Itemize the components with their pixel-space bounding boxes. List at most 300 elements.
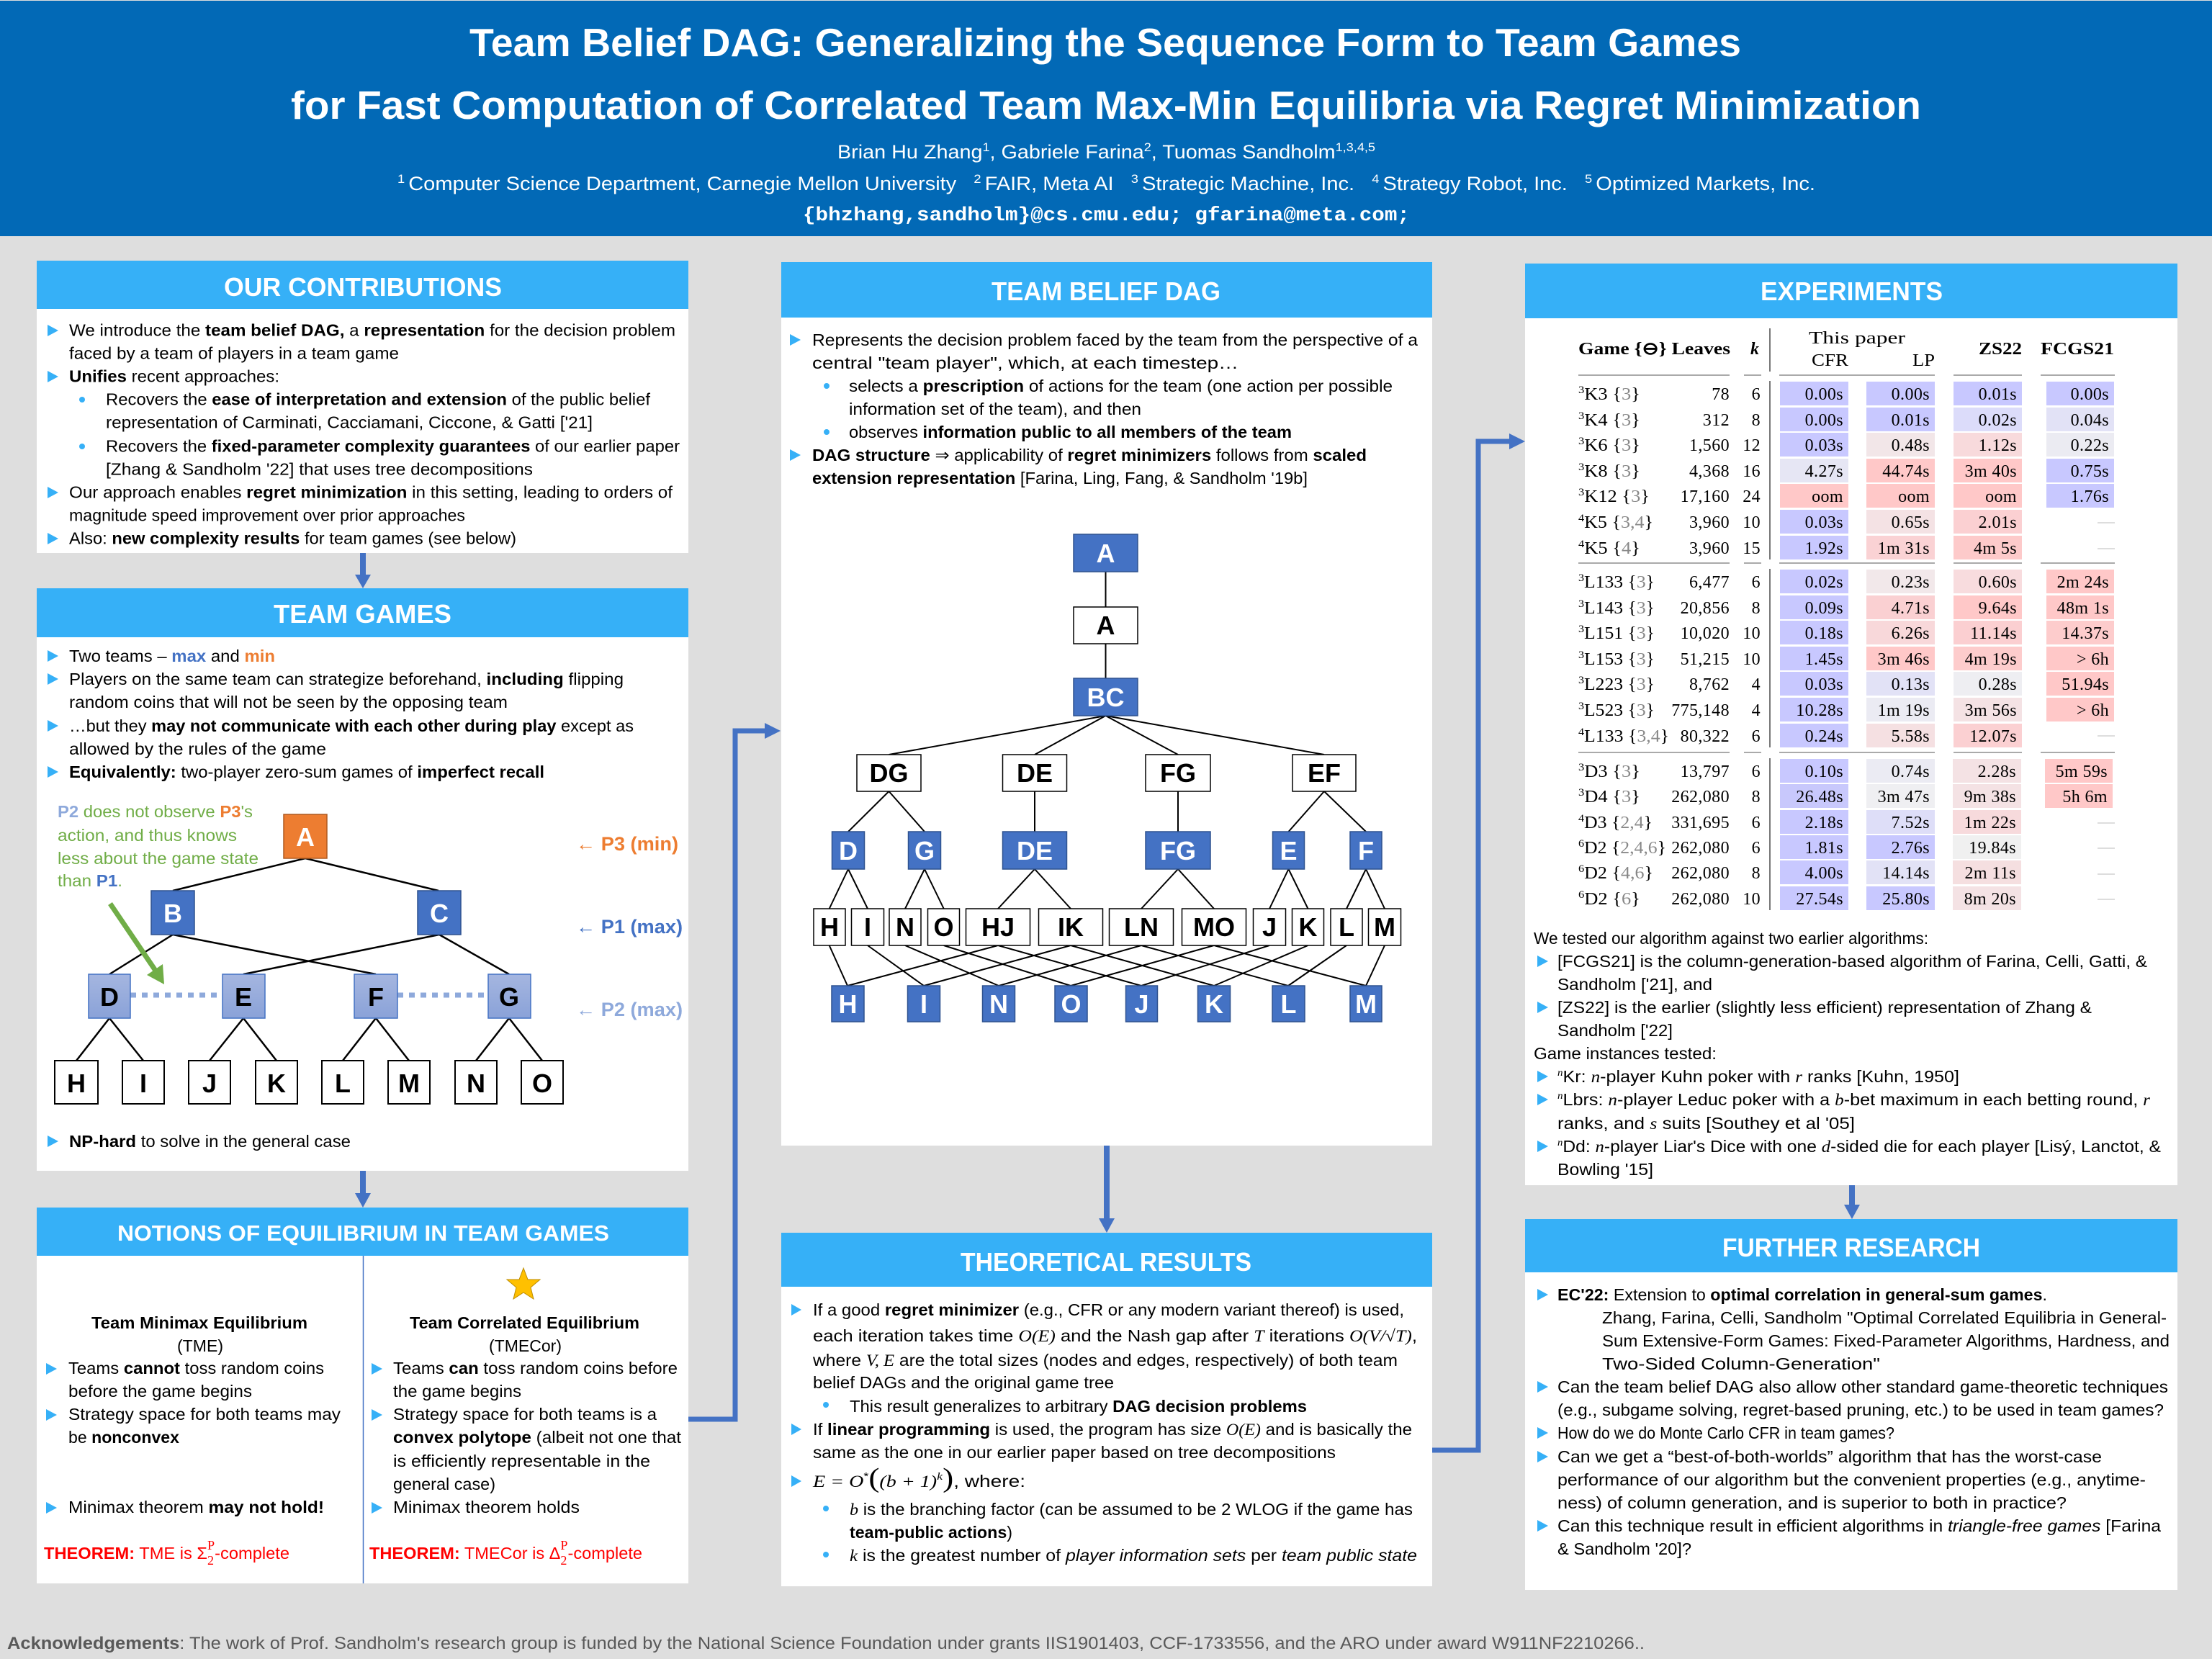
row 3L523: 775,148 [1671,701,1730,720]
experiments text: Lbrs [1563,1090,1598,1109]
row 3L153: L153 { [1584,650,1637,669]
node N blue: N [989,989,1008,1019]
callout: P2 vs P1 information: P2 does not observe P3's [58,802,253,821]
leaf L: L [335,1069,351,1098]
experiments text: Sandholm ['22] [1557,1021,1673,1040]
DAG diagram [814,534,1401,1022]
row 3K6: 12 [1743,436,1761,455]
row 4K5 {3,4}: 3,960 [1689,513,1730,532]
row 4K5 {4}: 1m 31s [1878,539,1930,558]
panel: theoretical results [781,1233,1432,1586]
row 6D2 {2,4,6} [1578,835,2021,859]
poster header banner [0,1,2212,236]
node F blue [1350,832,1382,869]
node DE [1002,755,1067,791]
NP-hard note: NP-hard to solve in the general case [69,1132,351,1151]
table header: CFR [1812,351,1848,370]
node A [284,814,327,858]
row 3L153: 4m 19s [1965,650,2017,669]
row 3D3: 3 [1578,762,1584,773]
experiments text: Dd [1563,1137,1586,1156]
row 4K5 {3,4}: K5 { [1584,513,1621,532]
row 3D3: 0.10s [1805,763,1843,781]
panel: team belief dag [781,262,1432,1146]
panel: our contributions [37,261,688,553]
node FG: FG [1160,758,1196,788]
column: team correlated equilibrium: Teams can toss random coins before [393,1359,678,1377]
row 4D3: 6 [1752,814,1761,832]
row 3L143: 8 [1752,599,1761,618]
row 3L153: 10 [1743,650,1761,669]
row 3L223: 4 [1752,675,1761,694]
row 6D2 {4,6}: 4.00s [1805,864,1843,883]
icon: star [507,1268,540,1299]
row 3L523: 10.28s [1796,701,1843,720]
table header: LP [1912,351,1935,370]
contributions text: representation of Carminati, Cacciamani, Ciccone, & Gatti ['21] [106,413,593,432]
arrow: green pointer to information set [110,904,164,984]
team games text: …but they may not communicate with each other during play except as [69,716,634,735]
row 4K5 {3,4}: 4 [1578,513,1585,524]
row 3K12: K12 { [1584,487,1631,506]
bullets [791,1304,801,1487]
row 3D4: 3m 47s [1878,788,1930,806]
row 3L143: L143 { [1584,599,1637,618]
node H blue: H [838,989,857,1019]
row 4K5 {4}: 4m 5s [1974,539,2017,558]
leaf H [55,1061,98,1104]
experiments text: [ZS22] is the earlier (slightly less efficient) representation of Zhang & [1557,998,2092,1017]
affiliations: Strategic Machine, Inc. [1142,173,1372,194]
callout: P2 vs P1 information: less about the game state [58,849,258,868]
node L white: L [1339,912,1354,942]
team belief dag text: extension representation [Farina, Ling, Fang, & Sandholm '19b] [812,469,1308,487]
column: team correlated equilibrium: convex polytope (albeit not one that [393,1428,681,1447]
table header: FCGS21 [2041,340,2114,359]
node N white [889,909,921,945]
callout: P2 vs P1 information: than P1. [58,871,122,890]
row 3L523: 3} [1637,701,1654,720]
contributions text: Unifies recent approaches: [69,367,279,386]
heading: experiments: EXPERIMENTS [1761,276,1943,306]
row 3L223: 0.28s [1979,675,2017,694]
team belief dag text: selects a prescription of actions for the team (one action per possible [849,377,1393,395]
row 6D2 {2,4,6}: 1.81s [1805,839,1843,858]
panel: further research [1525,1219,2177,1590]
row 3L153: 3m 46s [1878,650,1930,669]
theoretical results text: (b + 1) [879,1473,937,1491]
bullets [48,650,58,778]
heading: notions: NOTIONS OF EQUILIBRIUM IN TEAM GAMES [117,1220,609,1246]
node J white: J [1262,912,1277,942]
row 3K12: oom [1812,487,1843,506]
row 3L151 [1578,621,2114,644]
row 4D3: 4 [1578,813,1585,824]
row 4K5 {3,4}: 0.03s [1805,513,1843,532]
row 3L151: 3 [1578,624,1584,635]
row 3D4: D4 { [1584,788,1622,806]
theoretical results text: each iteration takes time O(E) and the Nash gap after T iterations O(V/√T) , [813,1326,1417,1346]
row 3D4: 8 [1752,788,1761,806]
theorem: TMECor: THEOREM: TMECor is Δ [369,1544,560,1563]
row 3L153: > 6h [2077,650,2109,669]
row 4K5 {3,4}: 10 [1743,513,1761,532]
row 6D2 {6}: 6 [1578,889,1585,901]
row 3L523 [1578,698,2114,721]
row 3D3 [1578,759,2113,783]
team games text: Players on the same team can strategize beforehand, including flipping [69,670,624,688]
row 3L151: 6.26s [1892,624,1930,643]
row 3D3: 6 [1752,763,1761,781]
row 4K5 {4}: 3,960 [1689,539,1730,558]
row 3K8: 3m 40s [1965,462,2017,481]
bullet: NP-hard [48,1136,58,1147]
row 6D2 {2,4,6}: 6 [1752,839,1761,858]
experiments text: n [1557,1138,1563,1148]
theoretical results text: ( [868,1463,879,1493]
row 3L523: L523 { [1584,701,1637,720]
row 3L223: 8,762 [1689,675,1730,694]
row 3K12: 3 [1578,487,1584,498]
row 3L523: 4 [1752,701,1761,720]
affiliations: 1 [397,172,408,186]
column: team correlated equilibrium: (TMECor) [489,1336,562,1355]
row 4L133: 5.58s [1892,727,1930,746]
theoretical results text: b is the branching factor (can be assumed to be 2 WLOG if the game has [850,1500,1413,1519]
row 3K8: 0.75s [2071,462,2109,481]
arrow: contributions to team games [355,553,371,588]
node M white [1368,909,1401,945]
row 3L133: L133 { [1584,573,1637,592]
node D [89,974,130,1018]
theoretical results text: k is the greatest number of player information sets per team public state [850,1546,1417,1565]
node K blue [1198,986,1230,1022]
row 6D2 {2,4,6}: D2 { [1584,839,1620,858]
heading: team belief dag: TEAM BELIEF DAG [992,276,1220,306]
row 3K12: oom [1898,487,1930,506]
node BC [1074,678,1138,716]
row 6D2 {6}: 10 [1743,890,1761,909]
experiments text: n [1557,1091,1563,1102]
panel: notions of equilibrium [37,1208,688,1583]
row 3L151: 10 [1743,624,1761,643]
row 3L223: 0.03s [1805,675,1843,694]
heading: further research: FURTHER RESEARCH [1722,1233,1980,1262]
column: team correlated equilibrium: Strategy space for both teams is a [393,1405,657,1424]
title: for Fast Computation of Correlated Team Max-Min Equilibria via Regret Minimization [291,83,1921,127]
row 4L133: 4 [1578,727,1585,738]
row 6D2 {4,6}: 6 [1578,863,1585,875]
experiments text: We tested our algorithm against two earlier algorithms: [1534,929,1928,948]
row 4K5 {4}: 15 [1743,539,1761,558]
row 3K8 [1578,459,2114,482]
node A (observation) [1074,607,1138,644]
DAG edges [830,572,1385,986]
contributions text: We introduce the team belief DAG, a representation for the decision problem [69,321,675,340]
further research text: Zhang, Farina, Celli, Sandholm "Optimal Correlated Equilibria in General- [1602,1308,2167,1327]
node N blue [982,986,1015,1022]
theoretical results text: ) [943,1463,953,1493]
team games text: random coins that will not be seen by the opposing team [69,693,508,711]
row 3K4: 3} [1622,411,1640,430]
row 3L143: 9.64s [1979,599,2017,618]
theoretical results text: k [937,1471,943,1483]
leaf J: J [202,1069,217,1098]
node I blue [907,986,940,1022]
column: team minimax equilibrium: before the game begins [68,1382,252,1401]
row 3K12: 3} [1631,487,1649,506]
row 4D3: D3 { [1584,814,1620,832]
further research text: ness) of column generation, and is superior to both in practice? [1557,1493,2067,1512]
row 3K6: 1.12s [1979,436,2017,455]
table header [1578,329,2114,370]
row 3K3: 0.00s [1805,385,1843,404]
node IK [1038,909,1103,945]
row 3K4: 312 [1703,411,1730,430]
row 3L143: 20,856 [1681,599,1730,618]
theorem: TME: P [207,1538,215,1552]
callout: P2 vs P1 information [58,802,258,890]
node LN [1109,909,1174,945]
node F blue: F [1358,836,1374,866]
experiments text: Kr [1563,1067,1581,1086]
row 6D2 {2,4,6}: 2,4,6} [1620,839,1665,858]
row 3L523: 3 [1578,701,1584,712]
affiliations: 5 [1585,172,1596,186]
row 3D4: 9m 38s [1964,788,2016,806]
row 3K3: 3} [1622,385,1640,404]
experiments text: ranks, and s suits [Southey et al '05] [1557,1114,1855,1133]
node DE: DE [1017,758,1053,788]
further research text: performance of our algorithm but the convenient properties (e.g., anytime- [1557,1470,2146,1489]
row 4D3: 1m 22s [1964,814,2016,832]
row 6D2 {4,6}: 8 [1752,864,1761,883]
leaf O: O [532,1069,552,1098]
node F [354,974,397,1018]
experiments text [1534,929,2161,1179]
row 3K3 [1578,382,2114,405]
node E [222,974,265,1018]
row 3K4: 8 [1752,411,1761,430]
affiliations: Computer Science Department, Carnegie Mellon University [408,173,974,194]
row 4L133: 80,322 [1681,727,1730,746]
node O blue [1055,986,1087,1022]
row 4D3: 331,695 [1671,814,1730,832]
further research text: Two-Sided Column-Generation" [1602,1354,1880,1373]
row 3K3: 0.01s [1979,385,2017,404]
information set links [130,992,488,998]
row 6D2 {2,4,6}: 19.84s [1969,839,2016,858]
row 3L143: 0.09s [1805,599,1843,618]
theorem: TMECor: P [560,1538,567,1552]
team games text: Equivalently: two-player zero-sum games of imperfect recall [69,763,544,781]
node A (team) [1074,534,1138,572]
node IK: IK [1058,912,1084,942]
node G [488,974,531,1018]
row 3L151: 10,020 [1681,624,1730,643]
row 6D2 {6} [1578,886,2021,910]
column: team correlated equilibrium: is efficiently representable in the [393,1452,650,1470]
experiments text: n [1557,1068,1563,1079]
row 4K5 {3,4}: 0.65s [1892,513,1930,532]
node K white: K [1299,912,1318,942]
row 3K8: 16 [1743,462,1761,481]
row 3K4: 0.04s [2071,411,2109,430]
node FG blue [1146,832,1210,869]
row 6D2 {6}: 25.80s [1882,890,1930,909]
experiments text: Game instances tested: [1534,1044,1717,1063]
row 4K5 {3,4}: 2.01s [1979,513,2017,532]
affiliations: FAIR, Meta AI [985,173,1131,194]
team belief dag text: DAG structure ⇒ applicability of regret minimizers follows from scaled [812,446,1367,464]
authors: 1 [982,140,990,154]
bullets [1537,1289,1548,1532]
node J white [1253,909,1286,945]
row 4K5 {4}: 4} [1622,539,1640,558]
callout: P2 vs P1 information: action, and thus knows [58,826,237,845]
contributions text: [Zhang & Sandholm '22] that uses tree decompositions [106,459,533,478]
row 3D3: D3 { [1584,763,1622,781]
row 3K6: 1,560 [1689,436,1730,455]
row 6D2 {4,6} [1578,860,2021,884]
row 4D3: 2.18s [1805,814,1843,832]
row 3K8: 44.74s [1882,462,1930,481]
affiliations: Optimized Markets, Inc. [1596,173,1815,194]
row 3K8: 3} [1622,462,1640,481]
node D blue: D [839,836,858,866]
node J blue: J [1134,989,1149,1019]
arrow: team games to notions [355,1171,371,1208]
column: team correlated equilibrium: Minimax theorem holds [393,1498,580,1516]
leaf N [455,1061,497,1104]
node C: C [430,899,449,928]
row 6D2 {4,6}: 4,6} [1621,864,1653,883]
leaf L [322,1061,364,1104]
table header: Game {⊖} Leaves [1578,340,1730,359]
row 6D2 {6}: 262,080 [1671,890,1730,909]
row 3K6 [1578,433,2114,457]
panel: team games [37,588,688,1171]
node O white: O [933,912,954,942]
experiments text: [FCGS21] is the column-generation-based algorithm of Farina, Celli, Gatti, & [1557,952,2147,971]
affiliations: Strategy Robot, Inc. [1383,173,1585,194]
row 3K3: 0.00s [2071,385,2109,404]
row 6D2 {6}: 27.54s [1796,890,1843,909]
further research text [1557,1285,2170,1558]
column: team minimax equilibrium: Team Minimax Equilibrium [91,1313,307,1332]
node A (team): A [1096,539,1115,568]
theoretical results text: If a good regret minimizer (e.g., CFR or any modern variant thereof) is used, [813,1300,1404,1319]
contributions text: faced by a team of players in a team game [69,344,399,363]
row 3L223: 3} [1637,675,1654,694]
contributions text: Also: new complexity results for team games (see below) [69,529,516,547]
player labels: ← P3 (min) [576,833,678,855]
node M blue: M [1355,989,1377,1019]
leaf K [256,1061,297,1104]
row 3K12: 1.76s [2071,487,2109,506]
row 3L143: 48m 1s [2057,599,2109,618]
column: team minimax equilibrium: (TME) [177,1336,223,1355]
leaf M [388,1061,430,1104]
row 3K8: K8 { [1584,462,1622,481]
row 3K8: 4,368 [1689,462,1730,481]
title [291,20,1921,127]
further research text: Can we get a “best-of-both-worlds” algorithm that has the worst-case [1557,1447,2102,1466]
node C [418,891,461,935]
column: team correlated equilibrium: Team Correlated Equilibrium [410,1313,639,1332]
row 3L143 [1578,595,2114,619]
row 4L133: 0.24s [1805,727,1843,746]
node O blue: O [1061,989,1082,1019]
bullets [1537,956,1548,1152]
row 3K4: 3 [1578,410,1584,422]
experiments text: Bowling '15] [1557,1160,1653,1179]
node M blue [1350,986,1382,1022]
row 3L133: 0.60s [1979,573,2017,592]
node FG [1146,755,1210,791]
row 3K12: 24 [1743,487,1761,506]
node A (observation): A [1096,611,1115,640]
row 6D2 {4,6}: D2 { [1584,864,1621,883]
node MO [1182,909,1246,945]
further research text: How do we do Monte Carlo CFR in team games? [1557,1424,1894,1442]
affiliations: 3 [1131,172,1142,186]
contributions text: Recovers the ease of interpretation and extension of the public belief [106,390,650,409]
authors: , Tuomas Sandholm [1151,141,1336,163]
theoretical results text: where V, E are the total sizes (nodes and edges, respectively) of both team [812,1351,1398,1370]
node N white: N [896,912,914,942]
row 3K12 [1578,484,2114,508]
node D blue [832,832,864,869]
row 6D2 {2,4,6}: 6 [1578,838,1585,850]
player labels: ← P1 (max) [576,916,683,938]
row 3K3: K3 { [1584,385,1622,404]
row 3L223: 3 [1578,675,1584,686]
row 3L133 [1578,570,2114,593]
column: team minimax equilibrium: Strategy space for both teams may [68,1405,341,1424]
node MO: MO [1193,912,1235,942]
row 4L133: 6 [1752,727,1761,746]
table rules [1578,375,2115,752]
team games text: allowed by the rules of the game [69,739,326,758]
contributions text: Recovers the fixed-parameter complexity guarantees of our earlier paper [106,436,680,455]
row 4D3: 7.52s [1892,814,1930,832]
row 3K6: 0.03s [1805,436,1843,455]
theoretical results text: belief DAGs and the original game tree [813,1373,1114,1392]
row 4L133: 12.07s [1969,727,2017,746]
tree edges [76,858,542,1061]
row 3K3: 78 [1712,385,1730,404]
node O white [927,909,959,945]
row 3L523: > 6h [2077,701,2109,720]
column: team correlated equilibrium: general case) [393,1475,495,1493]
row 3D4: 262,080 [1671,788,1730,806]
row 3L153: 51,215 [1681,650,1730,669]
row 3L133: 6,477 [1689,573,1730,592]
row 4K5 {4} [1578,536,2022,559]
team belief dag text [812,331,1419,487]
row 6D2 {6}: 8m 20s [1964,890,2016,909]
player labels: ← P2 (max) [576,999,683,1020]
row 4K5 {3,4}: 3,4} [1621,513,1653,532]
dashes for missing values [2098,523,2115,899]
row 3L143: 4.71s [1892,599,1930,618]
node A: A [296,822,315,852]
node DG [857,755,921,791]
player labels [576,833,683,1020]
row 3K4 [1578,408,2114,431]
node H blue [832,986,864,1022]
